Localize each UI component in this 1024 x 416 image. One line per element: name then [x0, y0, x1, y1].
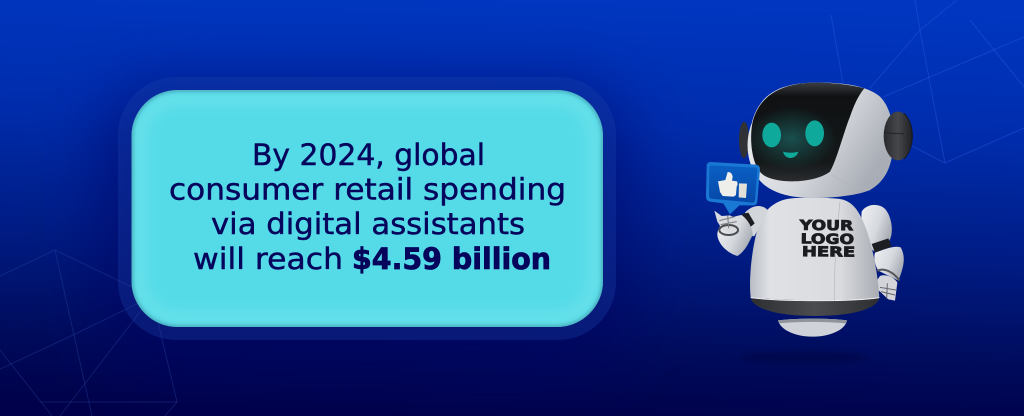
statistic text: will reach: [193, 242, 343, 276]
robot eye left: [762, 123, 781, 147]
logo placeholder text: [798, 218, 856, 261]
logo placeholder text: HERE: [802, 244, 855, 261]
robot visor: [751, 83, 864, 181]
statistic text: $4.59 billion: [352, 242, 551, 276]
robot bottom disc: [778, 319, 847, 337]
robot left arm and hand: [714, 206, 768, 256]
robot right ear: [884, 112, 912, 160]
visor glow: [747, 107, 837, 170]
cuff glyph: [739, 183, 747, 198]
thumb glyph: [718, 172, 738, 197]
panel halo: [118, 77, 616, 340]
statistic text: via digital assistants: [211, 207, 525, 241]
icon: thumbs up speech bubble: [706, 162, 760, 214]
statistic text: By 2024, global: [252, 138, 485, 172]
network lines top right: [831, 0, 1024, 163]
logo placeholder text: YOUR: [799, 218, 854, 234]
robot head: [747, 83, 893, 198]
robot left ear: [739, 122, 749, 158]
statistic text: [169, 138, 566, 276]
robot ground shadow: [740, 352, 867, 364]
panel drop shadow: [100, 85, 630, 375]
robot mouth: [783, 152, 798, 158]
network lines bottom left: [0, 250, 177, 416]
robot torso: [750, 198, 879, 316]
statistic text: consumer retail spending: [169, 172, 566, 206]
robot right arm: [857, 205, 904, 301]
logo placeholder text: LOGO: [801, 231, 854, 248]
panel: statistic callout: [132, 90, 603, 327]
robot illustration: [706, 83, 912, 364]
robot eye right: [805, 120, 824, 146]
